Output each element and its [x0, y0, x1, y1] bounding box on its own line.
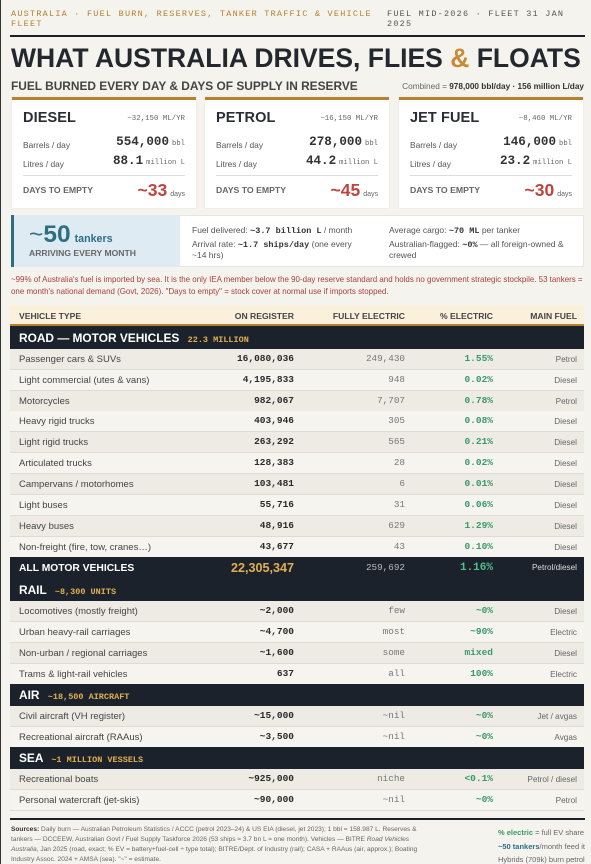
row: urban heavy rail: ~90%: [470, 626, 493, 637]
row: recreational boats: Recreational boats: [19, 774, 98, 785]
row: non-urban: [10, 643, 584, 664]
row: heavy rigid: Diesel: [554, 417, 577, 426]
row: articulated: 0.02%: [464, 457, 493, 468]
row: personal watercraft: ~0%: [476, 794, 493, 805]
row: locomotives: Locomotives (mostly freight): [19, 606, 138, 617]
row: heavy buses: 1.29%: [464, 520, 493, 531]
section: air: AIR ~18,500 AIRCRAFT: [19, 688, 129, 702]
row: urban heavy rail: ~4,700: [260, 626, 294, 637]
side notes: ~50 tankers/month feed it: [498, 842, 585, 850]
row: passenger cars: 16,080,036: [237, 353, 294, 364]
row: motorcycles: [10, 391, 584, 412]
row: passenger cars: Passenger cars & SUVs: [19, 354, 121, 365]
card: diesel: Barrels / day: [23, 140, 70, 150]
row: motorcycles: 982,067: [254, 395, 294, 406]
row: all motor vehicles total: [10, 557, 584, 579]
card: diesel: DAYS TO EMPTY: [23, 185, 93, 195]
row: light rigid: 0.21%: [464, 436, 493, 447]
tanker facts left: Fuel delivered: ~3.7 billion L / month: [192, 225, 352, 236]
top kicker right: FUEL MID-2026 · FLEET 31 JAN 2025: [387, 9, 564, 29]
row: all motor vehicles total: 1.16%: [460, 562, 493, 574]
row: light commercial: Light commercial (utes & vans): [19, 375, 149, 386]
row: recreational boats: <0.1%: [464, 773, 493, 784]
section: road: ROAD — MOTOR VEHICLES 22.3 MILLION: [19, 330, 249, 344]
row: personal watercraft: Petrol: [556, 796, 577, 805]
section: sea: SEA ~1 MILLION VESSELS: [19, 751, 143, 765]
row: light rigid: Diesel: [554, 438, 577, 447]
card: jet fuel: 146,000 bbl: [503, 135, 572, 149]
row: heavy rigid: 305: [388, 415, 405, 426]
tanker facts left: [192, 225, 352, 260]
sources: Australia, Jan 2025 (road, exact; % EV = battery+fuel-cell ÷ type total); BITRE/Dept. of Industry (rail); CASA + RAAus (air, approx.); Boating: [11, 846, 417, 853]
row: civil aircraft: Civil aircraft (VH register): [19, 711, 125, 722]
row: non-freight: Non-freight (fire, tow, cranes…): [19, 542, 151, 553]
row: heavy buses: 48,916: [260, 520, 294, 531]
row: light rigid: Light rigid trucks: [19, 437, 88, 448]
row: urban heavy rail: [10, 622, 584, 643]
row: light commercial: 0.02%: [464, 374, 493, 385]
combined total: Combined = 978,000 bbl/day · 156 million L/day: [402, 82, 584, 91]
row: passenger cars: [10, 349, 584, 370]
side notes: % electric = full EV share: [498, 828, 584, 837]
row: non-freight: 0.10%: [464, 541, 493, 552]
row: motorcycles: Petrol: [556, 397, 577, 406]
row: civil aircraft: ~0%: [476, 710, 493, 721]
row: non-freight: Diesel: [554, 543, 577, 552]
row: urban heavy rail: most: [383, 626, 405, 637]
row: heavy buses: Heavy buses: [19, 521, 74, 532]
card: petrol: PETROL: [216, 110, 275, 126]
sources: Sources: Daily burn — Australian Petroleum Statistics / ACCC (petrol 2023–24) & US EIA (diesel, jet 2023); 1 bbl = 158.987 L. Reserves &: [11, 826, 417, 833]
row: locomotives: ~2,000: [260, 605, 294, 616]
row: campervans: Campervans / motorhomes: [19, 479, 134, 490]
row: trams: Electric: [550, 670, 577, 679]
title: WHAT AUSTRALIA DRIVES, FLIES & FLOATS: [11, 43, 581, 73]
row: campervans: 0.01%: [464, 478, 493, 489]
row: civil aircraft: ~nil: [383, 710, 405, 721]
row: non-freight: [10, 537, 584, 558]
row: campervans: 103,481: [254, 478, 294, 489]
row: recreational aircraft: [10, 727, 584, 748]
row: articulated: 28: [394, 457, 405, 468]
row: articulated: Diesel: [554, 459, 577, 468]
row: all motor vehicles total: ALL MOTOR VEHICLES: [19, 563, 134, 574]
tanker facts right: [389, 225, 564, 260]
row: motorcycles: 7,707: [377, 395, 405, 406]
row: articulated: 128,383: [254, 457, 294, 468]
row: campervans: [10, 474, 584, 495]
row: recreational aircraft: Recreational aircraft (RAAus): [19, 732, 143, 743]
row: heavy rigid: 403,946: [254, 415, 294, 426]
card: petrol: 44.2 million L: [306, 154, 378, 168]
card: jet fuel: Litres / day: [410, 159, 451, 169]
row: recreational aircraft: ~3,500: [260, 731, 294, 742]
row: non-freight: 43,677: [260, 541, 294, 552]
table header: [10, 305, 584, 326]
row: campervans: 6: [399, 478, 405, 489]
row: light commercial: Diesel: [554, 376, 577, 385]
row: locomotives: ~0%: [476, 605, 493, 616]
table header: MAIN FUEL: [530, 310, 577, 320]
row: locomotives: Diesel: [554, 607, 577, 616]
card: diesel: [12, 97, 196, 208]
table header: % ELECTRIC: [440, 310, 493, 320]
card: diesel: 88.1 million L: [113, 154, 185, 168]
row: trams: 637: [277, 668, 294, 679]
sources: tankers — DCCEEW, Australian Govt / Fuel Supply Taskforce 2026 (53 ships ≈ 3.7 bn L ≈ one month). Vehicles — BITRE Road Vehicles: [11, 836, 409, 843]
row: motorcycles: Motorcycles: [19, 396, 70, 407]
section: road: [10, 326, 584, 349]
side notes: Hybrids (709k) burn petrol: [498, 855, 585, 864]
top kicker left: AUSTRALIA · FUEL BURN, RESERVES, TANKER TRAFFIC & VEHICLE FLEET: [11, 9, 372, 29]
tanker facts right: Australian-flagged: ~0% — all foreign-owned & crewed: [389, 239, 564, 260]
row: heavy rigid: [10, 411, 584, 432]
row: light buses: [10, 495, 584, 516]
table header: VEHICLE TYPE: [19, 310, 81, 320]
row: urban heavy rail: Urban heavy-rail carriages: [19, 627, 130, 638]
row: motorcycles: 0.78%: [464, 395, 493, 406]
row: passenger cars: Petrol: [556, 355, 577, 364]
row: civil aircraft: ~15,000: [254, 710, 294, 721]
row: light rigid: [10, 432, 584, 453]
row: light commercial: 4,195,833: [243, 374, 294, 385]
card: diesel: DIESEL: [23, 110, 76, 126]
row: recreational aircraft: Avgas: [554, 733, 577, 742]
row: light commercial: 948: [388, 374, 405, 385]
tanker panel: [11, 215, 584, 267]
row: all motor vehicles total: 259,692: [366, 562, 405, 573]
row: all motor vehicles total: Petrol/diesel: [532, 563, 577, 572]
row: all motor vehicles total: 22,305,347: [231, 561, 294, 575]
row: civil aircraft: Jet / avgas: [537, 712, 577, 721]
row: trams: Trams & light-rail vehicles: [19, 669, 127, 680]
card: petrol: 278,000 bbl: [309, 135, 378, 149]
section: sea: [10, 747, 584, 769]
tanker headline: ~50 tankers: [29, 221, 113, 248]
row: trams: [10, 664, 584, 685]
sources: [10, 826, 417, 863]
card: petrol: ~45 days: [331, 180, 378, 200]
row: articulated: [10, 453, 584, 474]
table header: FULLY ELECTRIC: [333, 310, 405, 320]
row: non-urban: mixed: [464, 647, 493, 658]
card: jet fuel: DAYS TO EMPTY: [410, 185, 480, 195]
row: recreational boats: ~925,000: [248, 773, 294, 784]
card: jet fuel: JET FUEL: [410, 110, 479, 126]
row: light buses: 55,716: [260, 499, 294, 510]
row: personal watercraft: ~nil: [383, 794, 405, 805]
row: non-freight: 43: [394, 541, 405, 552]
section: air: [10, 684, 584, 706]
subtitle: FUEL BURNED EVERY DAY & DAYS OF SUPPLY IN RESERVE: [11, 79, 358, 93]
card: petrol: Litres / day: [216, 159, 257, 169]
row: heavy buses: 629: [388, 520, 405, 531]
row: urban heavy rail: Electric: [550, 628, 577, 637]
row: recreational boats: Petrol / diesel: [527, 775, 577, 784]
row: light commercial: [10, 370, 584, 391]
card: petrol: DAYS TO EMPTY: [216, 185, 286, 195]
sources: Industry Assoc. 2024 + AMSA (sea). "~" = estimate.: [11, 856, 161, 863]
row: personal watercraft: ~90,000: [254, 794, 294, 805]
row: light buses: Light buses: [19, 500, 68, 511]
row: passenger cars: 249,430: [366, 353, 405, 364]
tanker headline: [11, 215, 180, 267]
card: petrol: [205, 97, 389, 208]
card: petrol: Barrels / day: [216, 140, 263, 150]
row: personal watercraft: Personal watercraft (jet-skis): [19, 795, 139, 806]
card: diesel: Litres / day: [23, 159, 64, 169]
row: light buses: Diesel: [554, 501, 577, 510]
row: trams: all: [388, 668, 405, 679]
card: jet fuel: ~8,460 ML/YR: [519, 115, 572, 123]
row: recreational boats: niche: [377, 773, 405, 784]
row: trams: 100%: [470, 668, 493, 679]
row: non-urban: Non-urban / regional carriages: [19, 648, 147, 659]
card: diesel: ~32,150 ML/YR: [127, 115, 185, 123]
warning note: ~99% of Australia's fuel is imported by sea. It is the only IEA member below the 90-day reserve standard and holds no government strategic stockpile. 53 tankers = one month's national demand (Govt, 2026). "Days to empty" = stock cover at normal use if imports stopped.: [11, 275, 583, 296]
section: rail: RAIL ~8,300 UNITS: [19, 583, 116, 597]
row: recreational aircraft: ~nil: [383, 731, 405, 742]
row: heavy rigid: 0.08%: [464, 415, 493, 426]
row: passenger cars: 1.55%: [464, 353, 493, 364]
row: campervans: Diesel: [554, 480, 577, 489]
row: recreational boats: [10, 769, 584, 790]
table header: ON REGISTER: [235, 310, 294, 320]
row: personal watercraft: [10, 790, 584, 811]
tanker headline: ARRIVING EVERY MONTH: [29, 248, 136, 258]
row: non-urban: Diesel: [554, 649, 577, 658]
row: articulated: Articulated trucks: [19, 458, 92, 469]
tanker facts left: Arrival rate: ~1.7 ships/day (one every ~14 hrs): [192, 239, 352, 260]
row: civil aircraft: [10, 706, 584, 727]
tanker facts right: Average cargo: ~70 ML per tanker: [389, 225, 520, 236]
row: recreational aircraft: ~0%: [476, 731, 493, 742]
row: heavy buses: [10, 516, 584, 537]
side notes: [498, 828, 585, 864]
card: petrol: ~16,150 ML/YR: [320, 115, 378, 123]
row: non-urban: ~1,600: [260, 647, 294, 658]
card: jet fuel: Barrels / day: [410, 140, 457, 150]
row: heavy rigid: Heavy rigid trucks: [19, 416, 94, 427]
card: jet fuel: ~30 days: [525, 180, 572, 200]
section: rail: [10, 579, 584, 601]
row: light buses: 0.06%: [464, 499, 493, 510]
row: non-urban: some: [383, 647, 405, 658]
row: heavy buses: Diesel: [554, 522, 577, 531]
row: light rigid: 565: [388, 436, 405, 447]
card: jet fuel: [399, 97, 583, 208]
card: jet fuel: 23.2 million L: [500, 154, 572, 168]
row: locomotives: [10, 601, 584, 622]
card: diesel: ~33 days: [138, 180, 185, 200]
card: diesel: 554,000 bbl: [116, 135, 185, 149]
row: light rigid: 263,292: [254, 436, 294, 447]
row: light buses: 31: [394, 499, 405, 510]
row: locomotives: few: [388, 605, 405, 616]
